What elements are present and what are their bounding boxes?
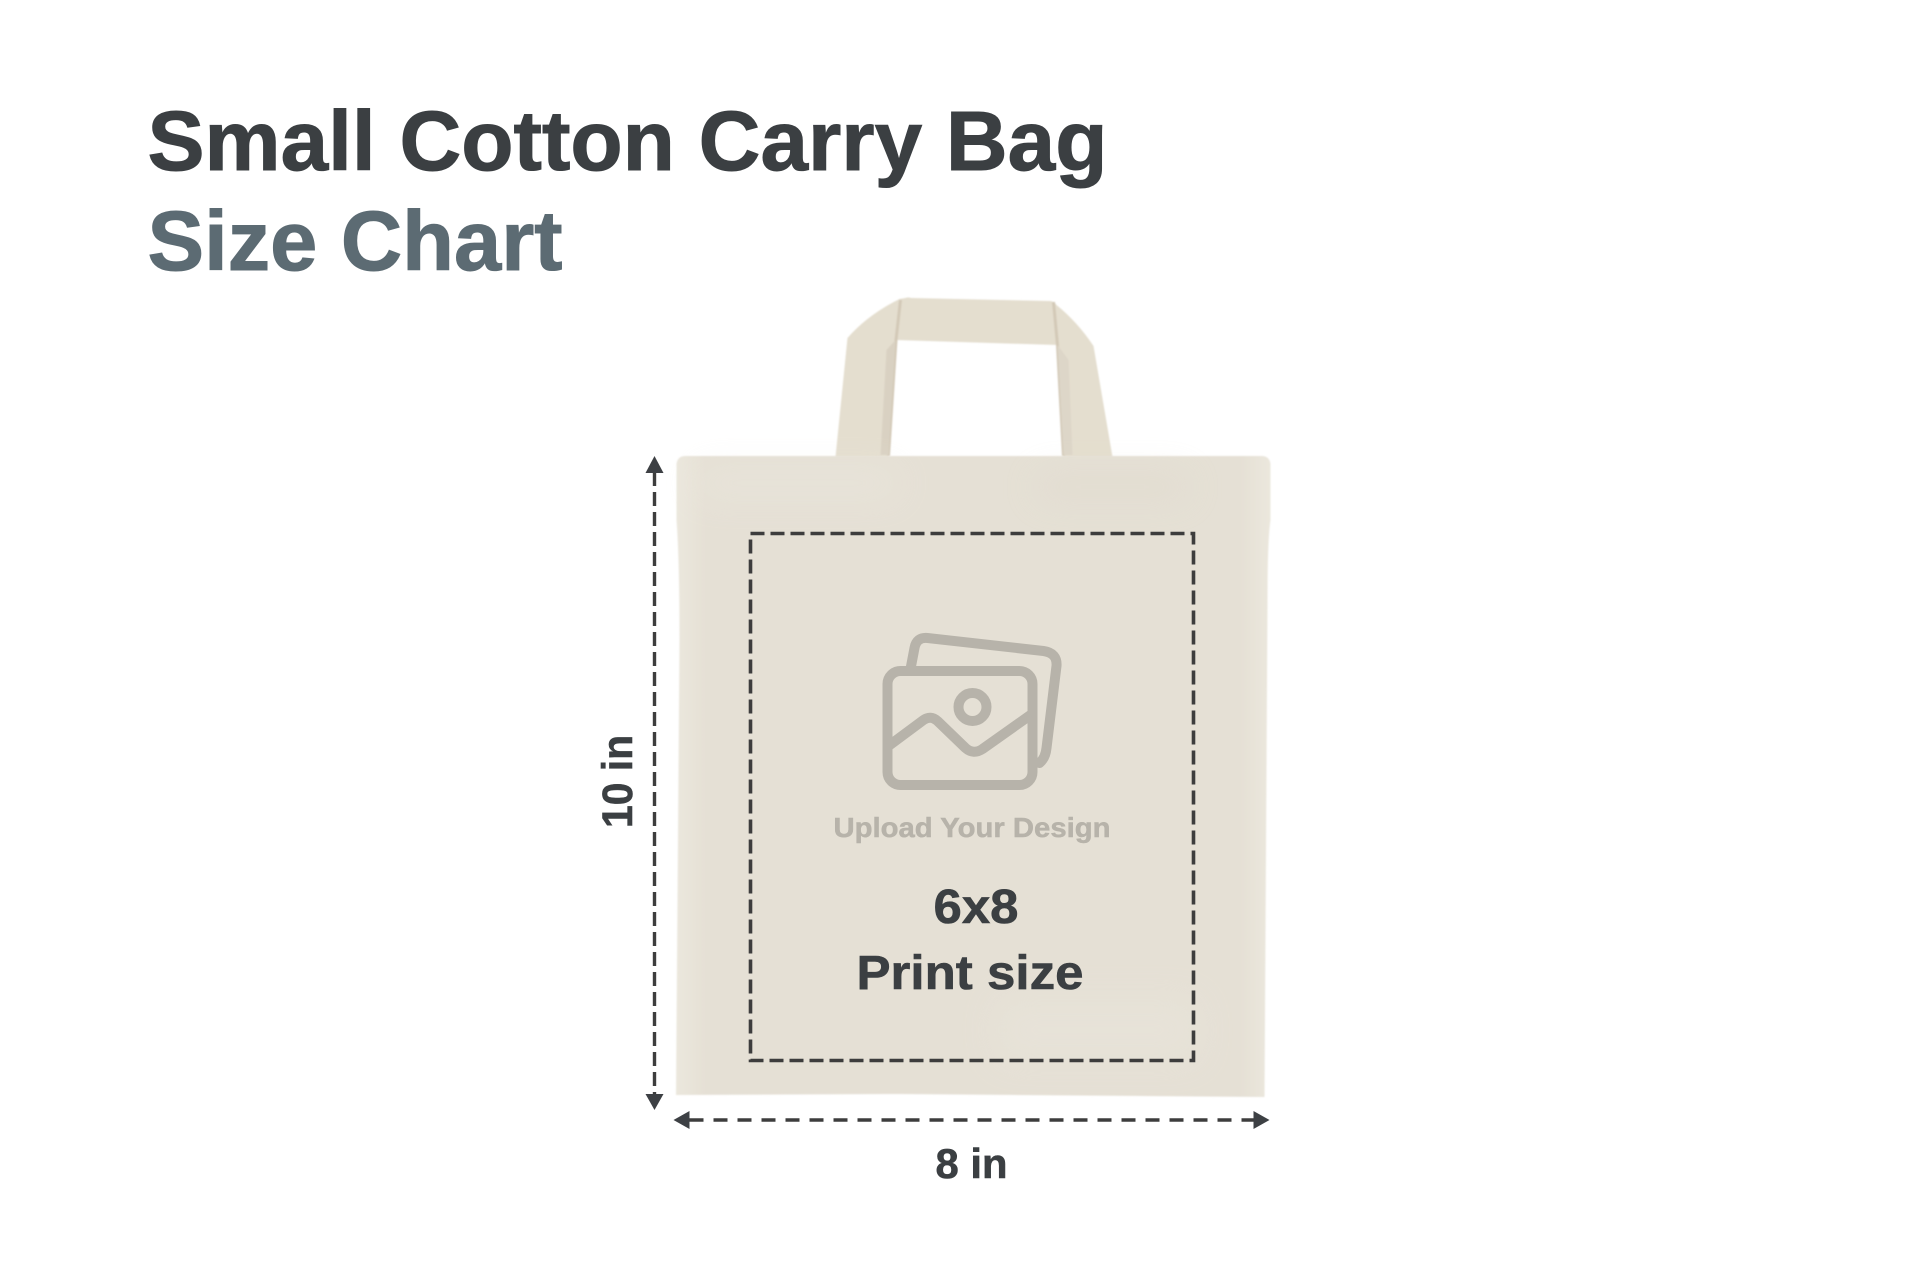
arrow: width dimension — [674, 1111, 1270, 1129]
arrow: height dimension — [646, 456, 664, 1110]
label: 8 in: 8 in — [936, 1140, 1008, 1187]
back photo card — [910, 638, 1057, 763]
bag handle — [836, 298, 1112, 457]
label: 10 in: 10 in — [594, 735, 642, 828]
label: print size caption: Print size — [856, 947, 1084, 1000]
sun circle — [958, 693, 986, 721]
bag body — [676, 456, 1270, 1097]
label: Upload Your Design: Upload Your Design — [834, 812, 1110, 843]
page content — [148, 94, 1270, 1187]
illustration: cotton tote bag — [676, 298, 1270, 1097]
front photo card — [888, 671, 1032, 785]
mountains — [888, 715, 1030, 752]
subtitle: Size Chart: Size Chart — [148, 194, 562, 288]
icon: upload image placeholder — [888, 638, 1057, 785]
title line: Small Cotton Carry Bag: Small Cotton Carry Bag — [148, 94, 1108, 188]
fabric shading — [698, 470, 1198, 1060]
heading: title — [148, 94, 1108, 288]
print area dashed outline — [750, 534, 1194, 1060]
label: print size value: 6x8 — [934, 881, 1018, 934]
